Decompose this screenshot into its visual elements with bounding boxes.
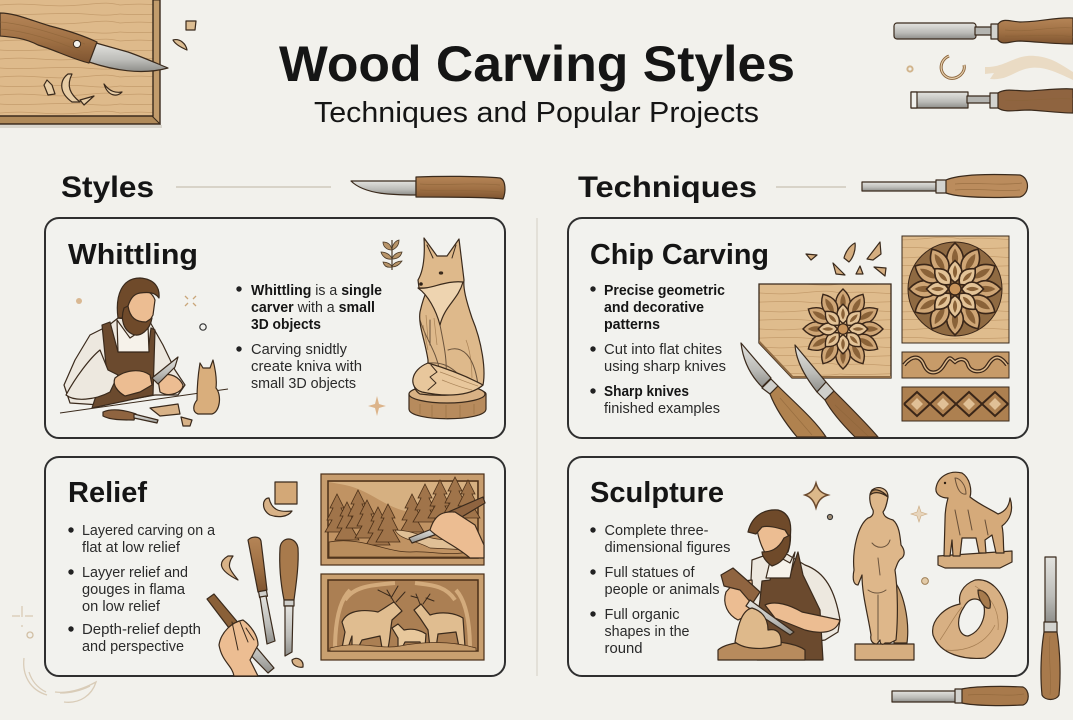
bullet list: Layered carving on a	[82, 523, 216, 539]
carved square with mandala	[902, 236, 1009, 343]
carved board with mandala	[759, 284, 891, 378]
bullet list: 3D objects	[251, 317, 321, 333]
heading: Relief	[68, 477, 147, 509]
illustration: carved fox	[409, 238, 486, 419]
illustration: man whittling	[60, 278, 228, 426]
heading: Sculpture	[590, 477, 724, 509]
panel: Whittling	[45, 218, 505, 438]
panel: Chip Carving	[568, 218, 1028, 438]
bullet list: create kniva with	[251, 359, 362, 375]
bullet list: and decorative	[604, 300, 704, 316]
bullet list: Layyer relief and	[82, 565, 188, 581]
gouge in hand	[439, 497, 485, 527]
bullet list: using sharp knives	[604, 359, 726, 375]
title: Wood Carving Styles	[279, 36, 795, 92]
carved dog	[936, 472, 1012, 568]
bullet list: people or animals	[604, 582, 720, 598]
carved border strips	[902, 352, 1009, 421]
bottom left decorative marks	[12, 606, 96, 702]
bullet list	[236, 283, 382, 392]
carved panel: forest landscape	[321, 474, 485, 565]
illustration: hand with gouge	[207, 594, 274, 676]
icon: chisel beside Techniques	[862, 175, 1028, 198]
right vertical chisel	[1041, 557, 1060, 700]
panel: Sculpture	[568, 457, 1028, 676]
decorative marks	[76, 240, 402, 416]
bullet list	[590, 523, 730, 657]
bullet list: Sharp knives	[604, 384, 689, 400]
illustration: wood board with knife	[0, 0, 196, 128]
bullet list: and perspective	[82, 639, 184, 655]
carved figure statue	[853, 488, 914, 660]
abstract organic sculpture	[933, 580, 1008, 658]
heading: Chip Carving	[590, 239, 769, 271]
bullet list: Full statues of	[604, 565, 695, 581]
heading: Techniques: Techniques	[578, 171, 757, 204]
bullet list: round	[604, 641, 642, 657]
heading: Whittling	[68, 239, 198, 271]
bullet list: Full organic	[604, 607, 680, 623]
bullet list: flat at low relief	[82, 540, 181, 556]
bottom right chisel	[892, 686, 1028, 706]
bullet list: shapes in the	[604, 624, 690, 640]
bullet list: finished examples	[604, 401, 720, 417]
bullet list: Depth-relief depth	[82, 622, 201, 638]
bullet list: Cut into flat chites	[604, 342, 722, 358]
sparkles and dots	[805, 483, 928, 584]
bullet list: Precise geometric	[604, 283, 725, 299]
illustration: gouges	[248, 537, 298, 656]
bullet list: dimensional figures	[604, 540, 730, 556]
illustration: sculptor	[718, 510, 840, 660]
illustration: wood cube and shavings	[221, 482, 303, 667]
wood chips	[806, 242, 886, 276]
bullet list: Whittling is a single	[251, 283, 382, 299]
bullet list: carver with a small	[251, 300, 375, 316]
panel: Relief	[45, 457, 505, 676]
top right chisels and shaving	[894, 18, 1073, 113]
carved panel: deer	[321, 574, 484, 660]
bullet list: on low relief	[82, 599, 161, 615]
icon: knife beside Styles	[351, 176, 505, 199]
knife blade	[89, 43, 168, 72]
bullet list	[68, 523, 216, 655]
wood chips	[44, 74, 122, 105]
bullet list: gouges in flama	[82, 582, 186, 598]
subtitle: Techniques and Popular Projects	[314, 97, 759, 129]
vertical divider	[536, 218, 538, 676]
bullet list: small 3D objects	[251, 376, 356, 392]
bullet list	[590, 283, 726, 417]
bullet list: Carving snidtly	[251, 342, 348, 358]
title	[279, 36, 795, 129]
bullet list: Complete three-	[604, 523, 709, 539]
knife handle	[0, 13, 97, 63]
heading: Styles: Styles	[61, 171, 154, 204]
bullet list: patterns	[604, 317, 660, 333]
illustration: chip knives	[741, 343, 878, 437]
